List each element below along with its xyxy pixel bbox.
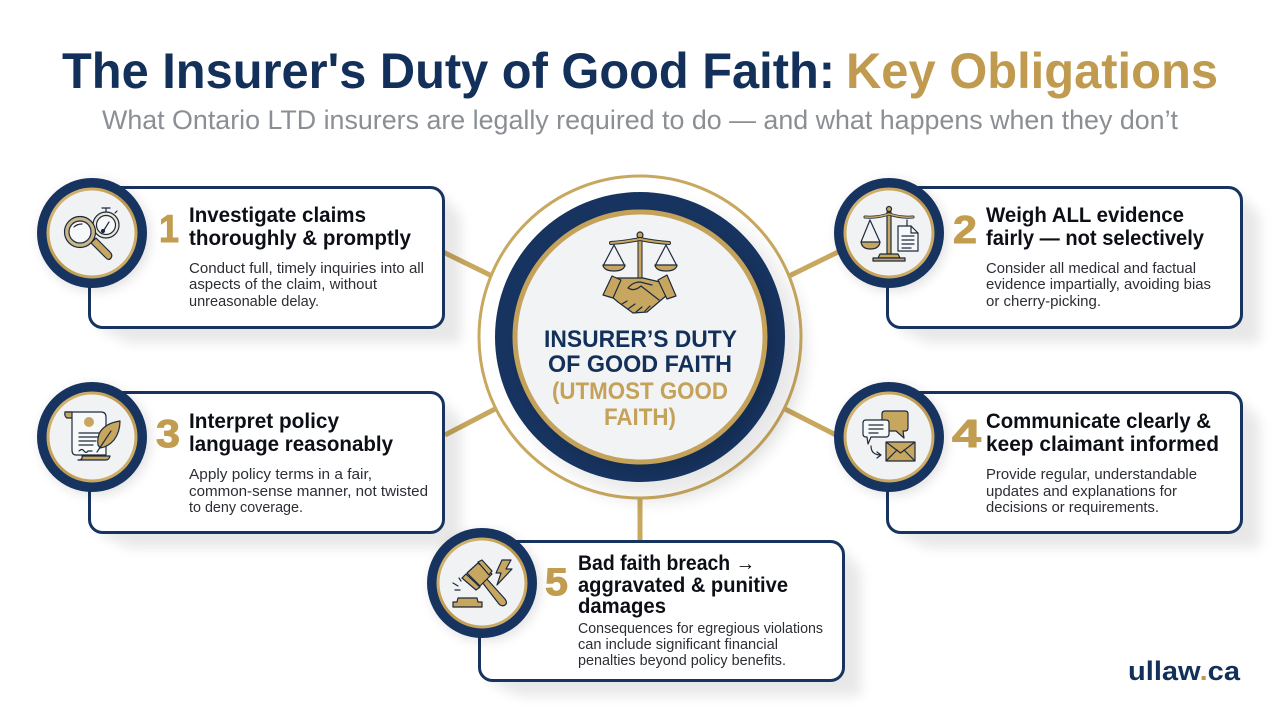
heading 3: language reasonably: [189, 433, 393, 456]
icon: magnifier and stopwatch: [64, 208, 119, 260]
subtitle: What Ontario LTD insurers are legally required to do — and what happens when they don’t: [102, 105, 1179, 135]
heading 1: thoroughly & promptly: [189, 227, 411, 250]
body 1: [189, 261, 424, 310]
title: [62, 43, 1218, 99]
heading 5: damages: [578, 595, 666, 618]
body 3: common-sense manner, not twisted: [189, 484, 428, 500]
heading 5: Bad faith breach →: [578, 552, 755, 575]
body 2: Consider all medical and factual: [986, 261, 1196, 277]
heading 3: Interpret policy: [189, 410, 339, 433]
icon: gavel and lightning: [453, 560, 512, 607]
panel: obligation 3: [37, 382, 461, 548]
heading 3: [189, 410, 393, 456]
heading 5: aggravated & punitive: [578, 574, 788, 597]
number 2: 2: [953, 209, 977, 252]
heading 1: [189, 204, 411, 250]
body 4: updates and explanations for: [986, 484, 1177, 500]
number 5: 5: [545, 561, 568, 604]
central label: FAITH): [604, 404, 676, 431]
body 3: Apply policy terms in a fair,: [189, 467, 372, 483]
central label: [544, 326, 737, 431]
heading 4: [986, 410, 1219, 456]
number 4: 4: [952, 413, 981, 456]
number 1: 1: [159, 208, 179, 251]
icon: scales and document: [861, 206, 918, 261]
icon: scales and handshake: [603, 232, 677, 313]
body 4: Provide regular, understandable: [986, 467, 1197, 483]
icon: policy scroll and quill: [65, 412, 120, 460]
body 2: or cherry-picking.: [986, 294, 1101, 310]
body 1: Conduct full, timely inquiries into all: [189, 261, 424, 277]
body 5: penalties beyond policy benefits.: [578, 653, 786, 669]
panel: obligation 2: [834, 178, 1260, 343]
title: The Insurer's Duty of Good Faith:: [62, 43, 835, 99]
heading 5: [578, 552, 788, 618]
central label: INSURER’S DUTY: [544, 326, 737, 353]
body 1: unreasonable delay.: [189, 294, 319, 310]
heading 2: Weigh ALL evidence: [986, 204, 1184, 227]
heading 1: Investigate claims: [189, 204, 366, 227]
body 5: can include significant financial: [578, 637, 778, 653]
panel: obligation 1: [37, 178, 461, 343]
central label: (UTMOST GOOD: [552, 378, 728, 405]
body 3: to deny coverage.: [189, 500, 303, 516]
heading 2: fairly — not selectively: [986, 227, 1204, 250]
heading 4: Communicate clearly &: [986, 410, 1211, 433]
body 2: [986, 261, 1211, 310]
logo: ullaw.ca: ullaw.ca: [1128, 656, 1241, 686]
heading 4: keep claimant informed: [986, 433, 1219, 456]
icon: speech bubbles and envelope: [863, 411, 915, 461]
connector lines: [443, 252, 838, 541]
heading 2: [986, 204, 1204, 250]
body 5: [578, 621, 823, 669]
central label: OF GOOD FAITH: [548, 351, 732, 378]
panel: central hub: [479, 176, 802, 500]
title: Key Obligations: [846, 43, 1218, 99]
body 2: evidence impartially, avoiding bias: [986, 277, 1211, 293]
panel: obligation 4: [834, 382, 1260, 548]
body 3: [189, 467, 428, 516]
body 5: Consequences for egregious violations: [578, 621, 823, 637]
body 1: aspects of the claim, without: [189, 277, 377, 293]
panel: obligation 5: [427, 528, 861, 696]
body 4: decisions or requirements.: [986, 500, 1159, 516]
body 4: [986, 467, 1197, 516]
number 3: 3: [156, 413, 180, 456]
